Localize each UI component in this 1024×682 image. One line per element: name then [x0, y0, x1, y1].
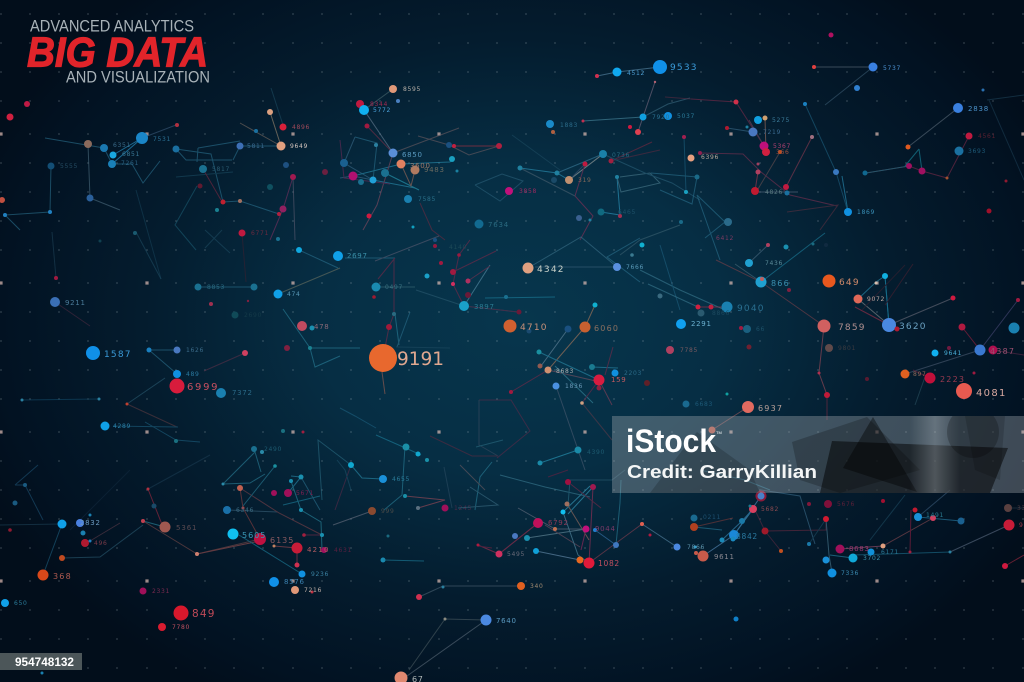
main node 9191	[369, 344, 444, 372]
network cluster: middle right: 2291	[691, 320, 712, 328]
network cluster: centre: 3897	[474, 303, 495, 311]
network cluster: middle right: 66	[756, 326, 765, 333]
network cluster: centre: 4710	[520, 323, 548, 333]
network cluster: middle right: 8866	[712, 310, 730, 317]
network cluster: top centre: 9483	[424, 166, 445, 174]
network cluster: middle right: 7436	[765, 260, 783, 267]
network cluster: lower right	[687, 470, 1024, 622]
network cluster: lower left: 650	[14, 600, 28, 607]
network cluster: lower right: 3702	[863, 555, 881, 562]
network cluster: top centre: 6850	[402, 151, 423, 159]
network cluster: lower centre: 1082	[598, 559, 620, 568]
network cluster: middle left	[20, 230, 368, 453]
network cluster: lower right: 1491	[926, 512, 944, 519]
network cluster: middle right: 866	[771, 279, 790, 288]
network cluster: middle right: 4081	[976, 388, 1007, 399]
network cluster: middle left: 9211	[65, 299, 86, 307]
network cluster: middle left: 2690	[244, 312, 262, 319]
network cluster: upper right: 7219	[763, 129, 781, 136]
network cluster: lower left: 849	[192, 608, 216, 620]
network cluster: upper right: 5737	[883, 65, 901, 72]
network cluster: lower left: 999	[381, 508, 395, 515]
network cluster: middle left: 4289	[113, 423, 131, 430]
image id tag: 954748132	[15, 655, 74, 669]
title: BIG DATA	[27, 28, 208, 76]
network cluster: top centre: 3858	[519, 188, 537, 195]
network cluster: centre: 8683	[556, 368, 574, 375]
network cluster: middle right: 7785	[680, 347, 698, 354]
network cluster: middle right: 2223	[940, 375, 965, 384]
network cluster: middle right: 649	[839, 278, 860, 288]
network cluster: middle right: 6683	[695, 401, 713, 408]
network cluster: top centre: 6465	[618, 209, 636, 216]
title	[27, 18, 210, 86]
network cluster: upper left: 6351	[113, 142, 131, 149]
network cluster: middle right: 9641	[944, 350, 962, 357]
network cluster: lower centre: 5495	[507, 551, 525, 558]
network cluster: upper left: 5811	[247, 143, 265, 150]
network cluster: top centre: 9533	[670, 63, 698, 73]
network cluster: middle right: 3620	[899, 322, 927, 332]
network cluster: middle left: 7372	[232, 389, 253, 397]
network cluster: top centre: 5772	[373, 107, 391, 114]
network cluster: top centre	[340, 60, 700, 240]
network cluster: middle left: 8853	[207, 284, 225, 291]
network cluster: upper right: 3693	[968, 148, 986, 155]
network cluster: upper right: 4826	[765, 189, 783, 196]
network cluster: upper right: 5275	[772, 117, 790, 124]
network cluster: lower left: 6135	[270, 536, 294, 545]
network cluster: centre: 6060	[594, 324, 619, 333]
network cluster: lower centre: 7640	[496, 617, 517, 625]
network cluster: top centre: 7920	[652, 114, 670, 121]
network cluster: middle right: 9801	[838, 345, 856, 352]
network cluster: middle left: 489	[186, 371, 200, 378]
network cluster: middle right: 7859	[838, 323, 866, 333]
network cluster: lower right: 7336	[841, 570, 859, 577]
network cluster: upper right: 6412	[716, 235, 734, 242]
network cluster: middle right: 9072	[867, 296, 885, 303]
network cluster: top centre: 5037	[677, 113, 695, 120]
network cluster: top centre: 1883	[560, 122, 578, 129]
network cluster: centre: 159	[611, 376, 626, 384]
network cluster: lower left: 4631	[334, 547, 352, 554]
network cluster: middle left: 474	[287, 291, 301, 298]
network cluster: lower left: 6346	[236, 507, 254, 514]
network cluster: upper right: 366	[776, 149, 790, 156]
network cluster: middle right: 9040	[737, 304, 765, 314]
network cluster: middle left: 6999	[187, 382, 219, 393]
network cluster: upper left: 5817	[212, 166, 230, 173]
network cluster: lower left	[0, 440, 472, 674]
network cluster: upper left: 6851	[122, 151, 140, 158]
watermark panel	[612, 416, 1024, 493]
network cluster: lower centre: 6792	[548, 519, 569, 527]
main node 9191: 9191	[397, 349, 444, 370]
network cluster: upper left: 5555	[60, 163, 78, 170]
network cluster: top centre: 4512	[627, 70, 645, 77]
network cluster: middle left: 1626	[186, 347, 204, 354]
network cluster: lower right: 9611	[714, 553, 735, 561]
network cluster: centre: 7666	[626, 264, 644, 271]
network cluster: lower left: 4210	[307, 546, 330, 554]
network cluster: top centre: 319	[578, 177, 592, 184]
network cluster: middle left: 2490	[264, 446, 282, 453]
network cluster: centre: 0497	[385, 284, 403, 291]
network cluster: lower left: 4655	[392, 476, 410, 483]
network cluster: upper right	[651, 32, 1024, 260]
network cluster: middle left: 6771	[251, 230, 269, 237]
network cluster: upper right: 2838	[968, 105, 989, 113]
network cluster: middle left: 478	[314, 323, 329, 331]
network cluster: lower left: 2832	[80, 519, 101, 527]
network cluster: lower left: 368	[53, 572, 72, 581]
network cluster: lower right: 9	[1019, 522, 1024, 529]
network cluster: lower right: 8683	[849, 545, 870, 553]
network cluster: centre	[340, 220, 725, 470]
network cluster: middle right: 4387	[990, 347, 1015, 356]
network cluster: lower left: 5671	[296, 490, 314, 497]
network cluster: centre: 4342	[537, 265, 565, 275]
network cluster: lower right: 6171	[881, 549, 899, 556]
network cluster: lower right: 0211	[703, 514, 721, 521]
network cluster: lower centre	[383, 460, 680, 682]
network cluster: lower centre: 9044	[595, 525, 616, 533]
network cluster: lower right: 8842	[736, 532, 758, 541]
network cluster: top centre: 7634	[488, 221, 509, 229]
network cluster: lower left: 5361	[176, 524, 197, 532]
network cluster: upper right: 6396	[701, 154, 719, 161]
network cluster: lower left: 496	[94, 540, 108, 547]
network cluster: upper left	[0, 88, 328, 279]
network cluster: centre: 4140	[449, 244, 467, 251]
network cluster: top centre: 8344	[370, 101, 388, 108]
watermark panel: TM	[716, 430, 722, 435]
network cluster: upper right: 4561	[978, 133, 996, 140]
title: ADVANCED ANALYTICS	[30, 18, 194, 36]
network cluster: lower left: 5605	[242, 531, 266, 540]
network cluster: upper right: 5367	[773, 143, 791, 150]
image id tag	[0, 653, 82, 670]
network cluster: lower left: 7780	[172, 624, 190, 631]
network cluster: centre: 2203	[624, 370, 642, 377]
network cluster: middle right: 6937	[758, 404, 783, 413]
network cluster: lower left: 2331	[152, 588, 170, 595]
network cluster: top centre: 3600	[410, 162, 431, 170]
network cluster: middle left: 1587	[104, 350, 132, 360]
network cluster: lower left: 8576	[284, 578, 305, 586]
network cluster: lower right: 7866	[687, 544, 705, 551]
network cluster: upper left: 4896	[292, 124, 310, 131]
network cluster: upper left: 7531	[153, 136, 171, 143]
network cluster: top centre: 7585	[418, 196, 436, 203]
watermark panel: Credit: GarryKillian	[627, 462, 817, 482]
network cluster: lower left: 9236	[311, 571, 329, 578]
network cluster: top centre: 8595	[403, 86, 421, 93]
network cluster: middle right	[648, 233, 1024, 434]
network cluster: upper left: 7261	[121, 160, 139, 167]
network cluster: centre: 4390	[587, 449, 605, 456]
network cluster: middle left: 2697	[347, 252, 368, 260]
network cluster: lower left: 7216	[304, 587, 322, 594]
title: AND VISUALIZATION	[66, 68, 210, 86]
network cluster: middle right: 897	[913, 371, 927, 378]
network cluster: upper right: 1869	[857, 209, 875, 216]
network cluster: centre: 1836	[565, 383, 583, 390]
network cluster: lower left: 1245	[454, 505, 472, 512]
watermark panel: iStock	[626, 423, 716, 459]
network cluster: lower right: 5682	[761, 506, 779, 513]
network cluster: lower right: 5676	[837, 501, 855, 508]
network cluster: lower centre: 340	[530, 583, 544, 590]
network cluster: upper left: 9649	[290, 143, 308, 150]
network cluster: top centre: 0736	[612, 152, 630, 159]
